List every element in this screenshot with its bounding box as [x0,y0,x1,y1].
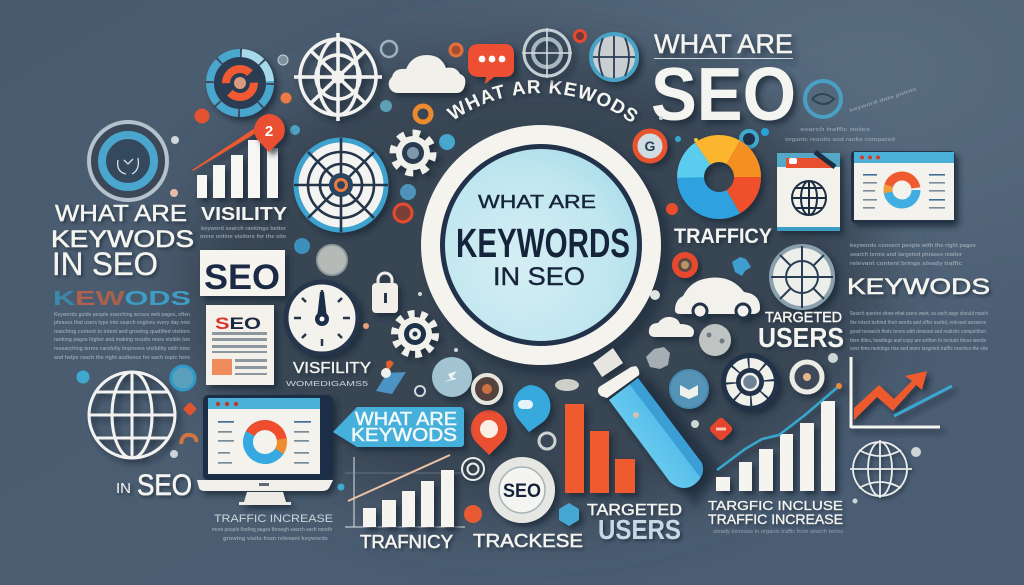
icon: SEO document: SEO [215,314,261,333]
label: visibility: VISILITY [201,204,287,224]
icon: red ring G [635,131,665,161]
label: in seo: IN [116,480,131,497]
label: targeted users lower: USERS [598,514,681,545]
label: keywods right: KEYWODS [847,274,990,299]
text block: faded notes: search traffic notes [800,127,870,133]
label: targeted users upper: TARGETED [765,309,842,326]
icon: left ring badge [89,122,167,200]
icon: glassy blobs near handle [555,347,670,391]
icon: blue circle beside SEO [805,81,841,117]
icon: car [675,278,760,318]
text block: right paragraph: Search queries show what users want, so each page should match [850,311,988,317]
icon: SEO round badge: SEO [503,481,541,502]
lens text: IN SEO [493,263,585,291]
icon: cloud [389,55,465,93]
label: trafficy: TRAFFICY [674,225,772,248]
icon: ring with orange centre [792,362,822,392]
text block: right paragraph: good research finds terms with demand and realistic competition [850,329,986,335]
icon: pale ball [699,324,731,356]
icon: laptop with donut chart [197,395,333,505]
text block: left paragraph: matching content to intent and growing qualified visitors [54,329,190,335]
label: targeted users upper: USERS [758,322,844,353]
card: SEO label: SEO [204,258,280,297]
icon: small top rings and dots [170,41,462,275]
bar chart: visibility bars with red arrow [192,126,278,198]
lens text: WHAT ARE [478,192,596,212]
icon: blue speech bubble [513,385,550,432]
lens text [456,192,630,291]
icon: red ring [675,255,695,275]
icon: blue bullseye target [294,138,388,232]
label: traffic increase right [708,499,843,527]
label: in seo [116,469,192,502]
text block: upper right paragraph: relevant content brings steady traffic [850,261,962,267]
icon: blue circle, ring and pinwheel [376,357,501,403]
text block: visfility caption: WOMEDIGAMS5 [286,381,368,388]
bar chart: trafnicy bars and line [345,455,465,527]
text block: right paragraph: the intent behind their words and offer useful, relevant answers [850,320,986,326]
heading: what are SEO: SEO [651,52,796,136]
speech label: what are keywods: WHAT ARE [355,409,457,429]
label: trafnicy: TRAFNICY [360,532,453,552]
icon: blue circle lower right [670,370,708,408]
icon: gear lower [395,314,435,354]
heading: what are keywords in seo (left): WHAT ARE [55,200,187,226]
text block: faded notes [785,86,917,143]
label: traffic increase right: TRAFFIC INCREASE [708,511,843,527]
text block: left paragraph: researching terms carefully improves visibility with time [54,346,190,352]
text block: right paragraph: over time rankings rise and more targeted traffic reaches the site [850,346,988,352]
heading: what are keywords in seo (left) [51,200,194,282]
text block: traffic caption left: more people finding pages through search each month [212,527,332,533]
text block: upper right paragraph: search terms and targeted phrases matter [850,252,962,258]
text block: left paragraph [54,312,190,361]
text block: left paragraph: Keywords guide people searching across web pages, often [54,312,190,318]
icon: browser window with donut [851,151,955,223]
lens text: KEYWORDS [456,220,630,266]
icon: top ring target [522,28,572,78]
label: visfility: VISFILITY [293,360,371,377]
label: traffic increase left: TRAFFIC INCREASE [214,513,333,525]
label: targeted users lower [587,502,682,545]
text block: upper right paragraph: keywords connect people with the right pages [850,243,976,249]
icon: blue globe top [591,34,637,80]
icon: SEO round badge [489,457,555,523]
icon: small red ring [574,30,586,42]
text block: traffic caption right: steady increase in organic traffic from search terms [713,529,844,535]
magnifying glass [421,125,722,508]
speech label: what are keywods [333,407,464,447]
text block: traffic caption left: growing visits from relevant keywords [223,536,328,542]
icon: blue hexagon [559,503,579,526]
label: traffic increase right: TARGFIC INCLUSE [708,499,843,513]
text block: faded notes: keyword data points [849,86,917,114]
text block: left paragraph: phrases that users type into search engines every day now [54,320,190,326]
line chart: red arrow up [851,357,952,428]
icon: browser card with globe [777,152,840,231]
heading: curved what ar kewods: WHAT AR KEWODS [446,80,640,124]
icon: segmented target top left [210,53,270,113]
heading: what are keywords in seo (left): KEYWODS [51,226,194,253]
text block: upper right paragraph [850,243,976,267]
pie chart [679,137,759,217]
text block: visibility caption: more online visitors for the site [200,234,286,240]
icon: blue splash [732,257,751,276]
text block: right paragraph: then titles, headings and copy are written to include those words [850,338,986,344]
icon: SEO document [206,305,274,385]
small scattered bits [338,116,921,504]
icon: dark wheel target [721,353,779,411]
label: in seo: SEO [137,469,192,502]
label: targeted users lower: TARGETED [587,502,682,519]
text block: faded notes: organic results and ranks compared [785,137,895,143]
icon: red ring G: G [645,138,656,154]
text block: left paragraph: and helps reach the right audience for each topic here [54,355,190,361]
icon: small cloud [649,317,694,337]
icon: globe outline lower right [850,440,912,498]
lens ring [421,125,661,365]
small dots near pie [666,128,769,215]
text block: traffic caption left [212,527,332,542]
icon: red map pin with number: 2 [265,123,273,140]
icon: red map pin with number [254,114,285,152]
label: trackese: TRACKESE [473,531,583,551]
icon: red diamond [708,416,734,442]
icon: red chat bubble [468,44,514,84]
label: targeted users upper [758,309,844,353]
icon: globe right [771,246,833,308]
icon: clock gauge [286,282,358,354]
label: coloured keywords: K E W ODS [53,288,191,310]
icon: gear top [394,134,432,172]
icon: large globe lower left [89,372,175,458]
text block: right paragraph [850,311,988,352]
icon: globe crosshair top [294,33,382,121]
text block: left paragraph: ranking pages higher and making results more visible too [54,337,190,343]
icon: small ring beside red bars [539,433,555,449]
icon: red location bubble [471,410,507,455]
handle [593,348,703,488]
text block: visibility caption: keyword search rankings better [201,226,286,232]
bar chart: traffic growth with line [716,383,842,491]
soft shadow of glass [427,131,722,508]
icon: padlock [372,273,398,313]
heading: what are keywords in seo (left): IN SEO [52,246,158,282]
speech label: what are keywods: KEYWODS [351,425,457,445]
small icons left of laptop [76,366,197,458]
heading: what are SEO: WHAT ARE [654,29,793,59]
icon: spiral ring [462,458,484,480]
text block: visibility caption [200,226,286,240]
icon: orange dot [464,505,482,523]
bar chart: red bars [565,404,635,493]
